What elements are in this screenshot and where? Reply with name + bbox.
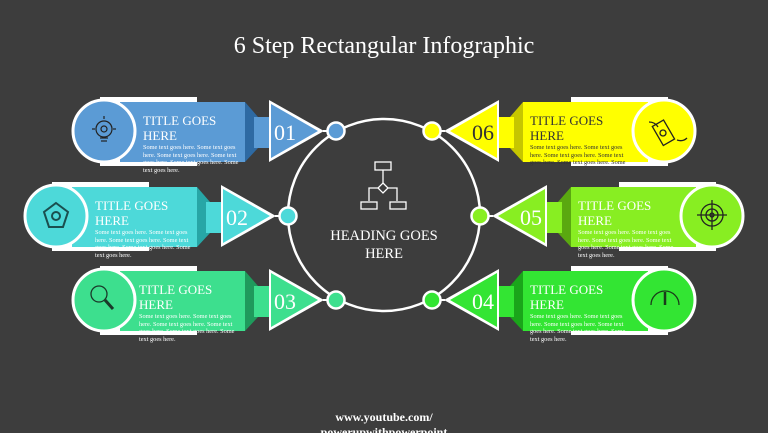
step 02: HERE [95,213,129,228]
step 03: Some text goes here. Some text goes [139,313,232,320]
icon: flying money [649,120,687,146]
step 03: text goes here. [139,336,176,343]
step 05: here. Some text goes here. Some text [578,237,672,244]
step 05 [472,182,743,259]
step 06 [424,97,695,166]
step 02: goes here. Some text goes here. Some [95,244,191,251]
central circle [288,119,480,311]
icon: magnifier [91,286,113,309]
icon: lightbulb [92,116,116,141]
step 06: TITLE GOES [530,113,603,128]
step 05: 05 [520,205,542,230]
step 06: goes here. Some text goes here. Some [530,159,626,166]
footer: www.youtube.com/ [335,410,433,424]
icon: target [697,200,727,230]
step 01: goes here. Some text goes here. Some [143,159,239,166]
step 05: TITLE GOES [578,198,651,213]
step 04: here. Some text goes here. Some text [530,321,624,328]
step 05: Some text goes here. Some text goes [578,229,671,236]
step 03: goes here. Some text goes here. Some [139,328,235,335]
heading: HEADING GOES [330,228,438,244]
step 04 [424,266,695,343]
step 03: here. Some text goes here. Some text [139,321,233,328]
step 03: TITLE GOES [139,282,212,297]
step 03: 03 [274,289,296,314]
icon: team [44,203,68,227]
step 01: here. Some text goes here. Some text [143,152,237,159]
step 02 [25,182,296,259]
icon: gauge [651,291,679,305]
step 06: 06 [472,120,494,145]
step 02: Some text goes here. Some text goes [95,229,188,236]
step 02: text goes here. [95,252,132,259]
step 04: HERE [530,297,564,312]
step 05: HERE [578,213,612,228]
step 05: text goes here. [578,252,615,259]
step 01: TITLE GOES [143,113,216,128]
step 01: 01 [274,120,296,145]
step 05: goes here. Some text goes here. Some [578,244,674,251]
step 04: goes here. Some text goes here. Some [530,328,626,335]
step 01 [73,97,344,174]
step 06: HERE [530,128,564,143]
step 04: Some text goes here. Some text goes [530,313,623,320]
step 06: Some text goes here. Some text goes [530,144,623,151]
step 02: TITLE GOES [95,198,168,213]
step 04: 04 [472,289,494,314]
title: 6 Step Rectangular Infographic [234,33,534,59]
icon: flowchart [361,162,406,209]
step 03: HERE [139,297,173,312]
step 04: TITLE GOES [530,282,603,297]
step 03 [73,266,344,343]
step 01: Some text goes here. Some text goes [143,144,236,151]
step 01: HERE [143,128,177,143]
step 02: here. Some text goes here. Some text [95,237,189,244]
step 06: here. Some text goes here. Some text [530,152,624,159]
step 01: text goes here. [143,167,180,174]
step 04: text goes here. [530,336,567,343]
central circle: HERE [365,246,403,262]
step 02: 02 [226,205,248,230]
